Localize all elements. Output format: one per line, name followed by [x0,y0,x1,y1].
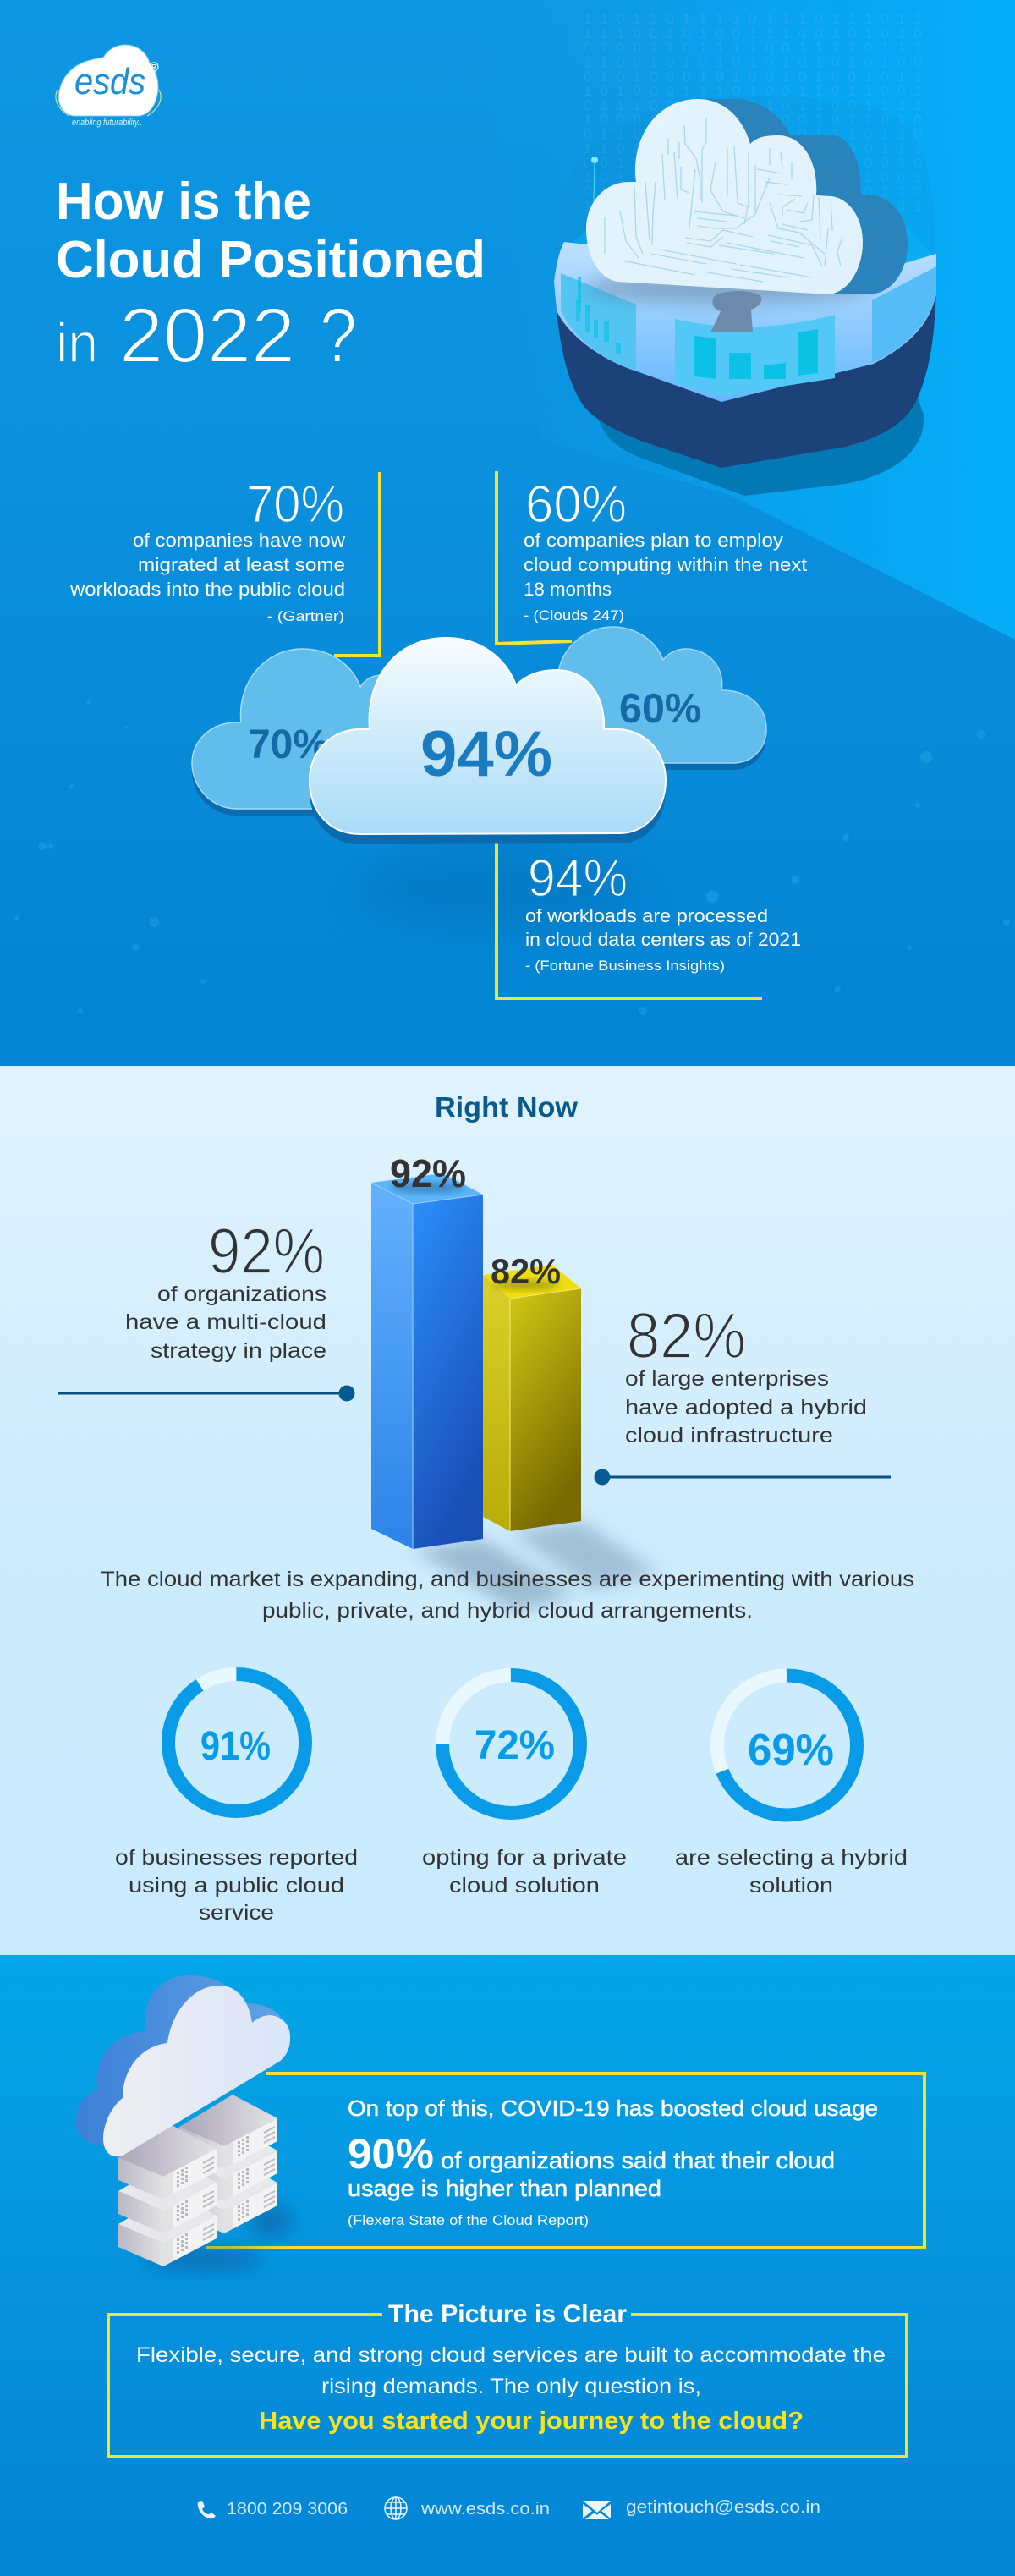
cloud: 60 percent: 60% [619,686,701,732]
paragraph: cloud market [101,1568,914,1623]
caption: private cloud: cloud solution [449,1874,600,1898]
callout: covid-19 boost: (Flexera State of the Cloud Report) [348,2212,589,2228]
footer: website: www.esds.co.in [420,2500,550,2518]
bar: 82 percent yellow: 82% [491,1251,561,1291]
donut: 91 percent: 91% [200,1724,271,1769]
panel: hero and cloud adoption statistics: 1 0 1 0 0 0 1 1 1 0 1 0 0 1 1 0 1 1 0 0 1 [584,83,922,99]
pointer: 82 percent [594,1469,891,1486]
title: in [56,311,98,374]
callout: the picture is clear: Have you started your journey to the cloud? [259,2408,804,2435]
callout: the picture is clear: rising demands. The only question is, [321,2375,701,2398]
pointer: 92 percent [58,1386,355,1401]
logo: esds: esds [74,61,145,102]
text: 92 percent multi-cloud: 92% [208,1216,325,1288]
caption: hybrid [675,1846,908,1898]
callout: covid-19 boost: usage is higher than planned [348,2176,661,2201]
cloud: 94 percent: 94% [420,718,552,790]
callout: the picture is clear: Flexible, secure, and strong cloud services are built to accommodate the [136,2343,886,2367]
stat: 94 percent of workloads: - (Fortune Business Insights) [525,958,725,974]
title: 2022 [119,293,295,379]
title: ? [320,293,357,379]
stat: 94 percent of workloads [525,849,801,974]
text: 82 percent hybrid: 82% [627,1300,746,1372]
panel: hero and cloud adoption statistics: 1 1 0 0 1 0 1 1 0 1 0 0 1 1 0 1 0 1 1 0 1 [584,198,922,214]
footer: email [583,2498,820,2519]
caption: hybrid: solution [749,1874,833,1898]
illustration: cloud over secure keyhole base [554,96,936,496]
stat: 70 percent of companies migrated: 70% [246,475,344,534]
stat: 70 percent of companies migrated [69,475,345,624]
panel: hero and cloud adoption statistics [0,0,1015,1066]
stat: 60 percent plan to employ cloud [524,475,807,623]
stat: 60 percent plan to employ cloud: of companies plan to employ [524,530,783,551]
bar: 92 percent blue: 92% [390,1151,466,1195]
connector lines [334,471,762,998]
text: 82 percent hybrid: cloud infrastructure [625,1424,833,1447]
panel: hero and cloud adoption statistics: 1 1 0 1 1 0 1 1 1 1 0 1 1 1 0 1 1 1 0 1 1 [584,11,922,27]
bar: 82 percent yellow [483,1251,581,1531]
donut: 69 percent [717,1675,857,1815]
bar: 92 percent blue [371,1151,483,1549]
title [56,173,486,379]
paragraph: cloud market: public, private, and hybrid cloud arrangements. [262,1599,753,1623]
caption: public cloud: service [199,1901,274,1925]
cloud: 60 percent [558,627,766,770]
title: Cloud Positioned [56,231,486,289]
panel: hero and cloud adoption statistics: 1 0 0 0 1 1 0 1 0 1 1 1 0 0 1 0 1 1 0 1 0 [584,112,922,128]
3D bar chart [371,1151,660,1612]
stat: 94 percent of workloads: in cloud data centers as of 2021 [525,929,801,950]
panel: hero and cloud adoption statistics: 1 1 1 0 0 1 0 1 0 0 1 1 1 0 0 1 0 1 0 1 0 [584,25,922,41]
title: How is the [56,173,311,231]
donut: 72 percent: 72% [475,1723,555,1768]
panel: hero and cloud adoption statistics: 1 0 1 0 1 1 0 0 1 0 1 0 0 1 1 1 0 1 0 0 1 [584,169,922,185]
caption: private cloud [422,1846,627,1898]
footer: website [385,2497,550,2519]
panel: hero and cloud adoption statistics: 0 1 1 1 0 0 1 1 1 0 1 1 0 1 1 0 0 1 1 1 1 [584,97,922,113]
panel: hero and cloud adoption statistics: 1 1 0 0 1 0 1 0 1 0 1 0 1 0 1 0 1 0 1 0 0 [584,54,922,70]
footer: phone: 1800 209 3006 [227,2500,348,2518]
panel: hero and cloud adoption statistics: 1 1 0 1 0 1 0 0 1 0 1 1 0 1 0 1 0 0 1 1 1 [584,140,922,157]
caption: private cloud: opting for a private [422,1846,627,1870]
text: 92 percent multi-cloud: have a multi-cloud [125,1310,326,1334]
illustration: cloud over servers [76,1975,292,2271]
text: 92 percent multi-cloud: strategy in place [151,1339,326,1363]
text: 82 percent hybrid: have adopted a hybrid [625,1396,867,1420]
donut: 69 percent: 69% [748,1726,834,1775]
stat: 70 percent of companies migrated: migrated at least some [138,554,345,575]
panel: hero and cloud adoption statistics: 0 1 0 0 1 1 0 1 1 1 1 0 0 1 1 1 1 0 1 1 1 [584,40,922,56]
callout: the picture is clear: The Picture is Clear [388,2300,627,2328]
panel: hero and cloud adoption statistics: 0 0 1 1 0 1 0 1 1 0 0 1 0 1 0 1 1 0 0 1 0 [584,155,922,171]
stat: 70 percent of companies migrated: workloads into the public cloud [69,579,345,600]
heading: right now: Right Now [435,1091,578,1123]
caption: hybrid: are selecting a hybrid [675,1846,908,1870]
logo: esds: R [151,63,156,71]
callout: the picture is clear [108,2300,907,2457]
stat: 60 percent plan to employ cloud: 18 months [524,579,612,600]
stat: 60 percent plan to employ cloud: - (Clouds 247) [524,607,624,623]
stat: 94 percent of workloads: 94% [528,849,628,908]
donut: 72 percent [442,1675,580,1813]
stat: 60 percent plan to employ cloud: 60% [525,475,627,534]
caption: public cloud: using a public cloud [129,1874,344,1898]
stat: 70 percent of companies migrated: - (Gartner) [267,608,344,624]
text: 92 percent multi-cloud: of organizations [157,1283,326,1306]
panel: covid and conclusion [0,1955,1015,2576]
panel: hero and cloud adoption statistics: 0 1 1 0 1 0 0 1 0 1 1 0 0 0 1 1 1 0 1 1 0 [584,126,922,142]
panel: right now [0,1066,1015,1955]
callout: covid-19 boost: On top of this, COVID-19 has boosted cloud usage [348,2095,878,2121]
stat: 94 percent of workloads: of workloads are processed [525,905,768,926]
text: 82 percent hybrid: of large enterprises [625,1367,829,1391]
paragraph: cloud market: The cloud market is expanding, and businesses are experimenting with various [101,1568,914,1591]
panel: hero and cloud adoption statistics: 0 1 0 1 0 0 0 1 0 1 0 0 1 0 1 0 0 1 0 1 1 [584,69,922,85]
footer: email: getintouch@esds.co.in [626,2498,820,2517]
caption: public cloud [115,1846,358,1925]
callout: covid-19 boost [206,2073,924,2248]
stat: 60 percent plan to employ cloud: cloud computing within the next [524,554,807,575]
caption: public cloud: of businesses reported [115,1846,358,1870]
panel: hero and cloud adoption statistics: 0 1 0 1 1 0 1 0 0 1 1 0 1 0 0 1 1 0 1 1 0 [584,184,922,200]
logo: esds: enabling futurability.. [72,118,142,128]
cloud: 70 percent: 70% [248,722,329,767]
callout: covid-19 boost: 90% [348,2130,434,2178]
text: 92 percent multi-cloud [125,1216,326,1363]
callout: covid-19 boost: of organizations said that their cloud [441,2148,835,2173]
logo: esds [56,45,161,128]
stat: 70 percent of companies migrated: of companies have now [133,530,345,551]
donut: 91 percent [168,1674,305,1811]
cloud: 70 percent [192,649,423,816]
cloud: 94 percent [310,638,666,844]
text: 82 percent hybrid [625,1300,867,1447]
